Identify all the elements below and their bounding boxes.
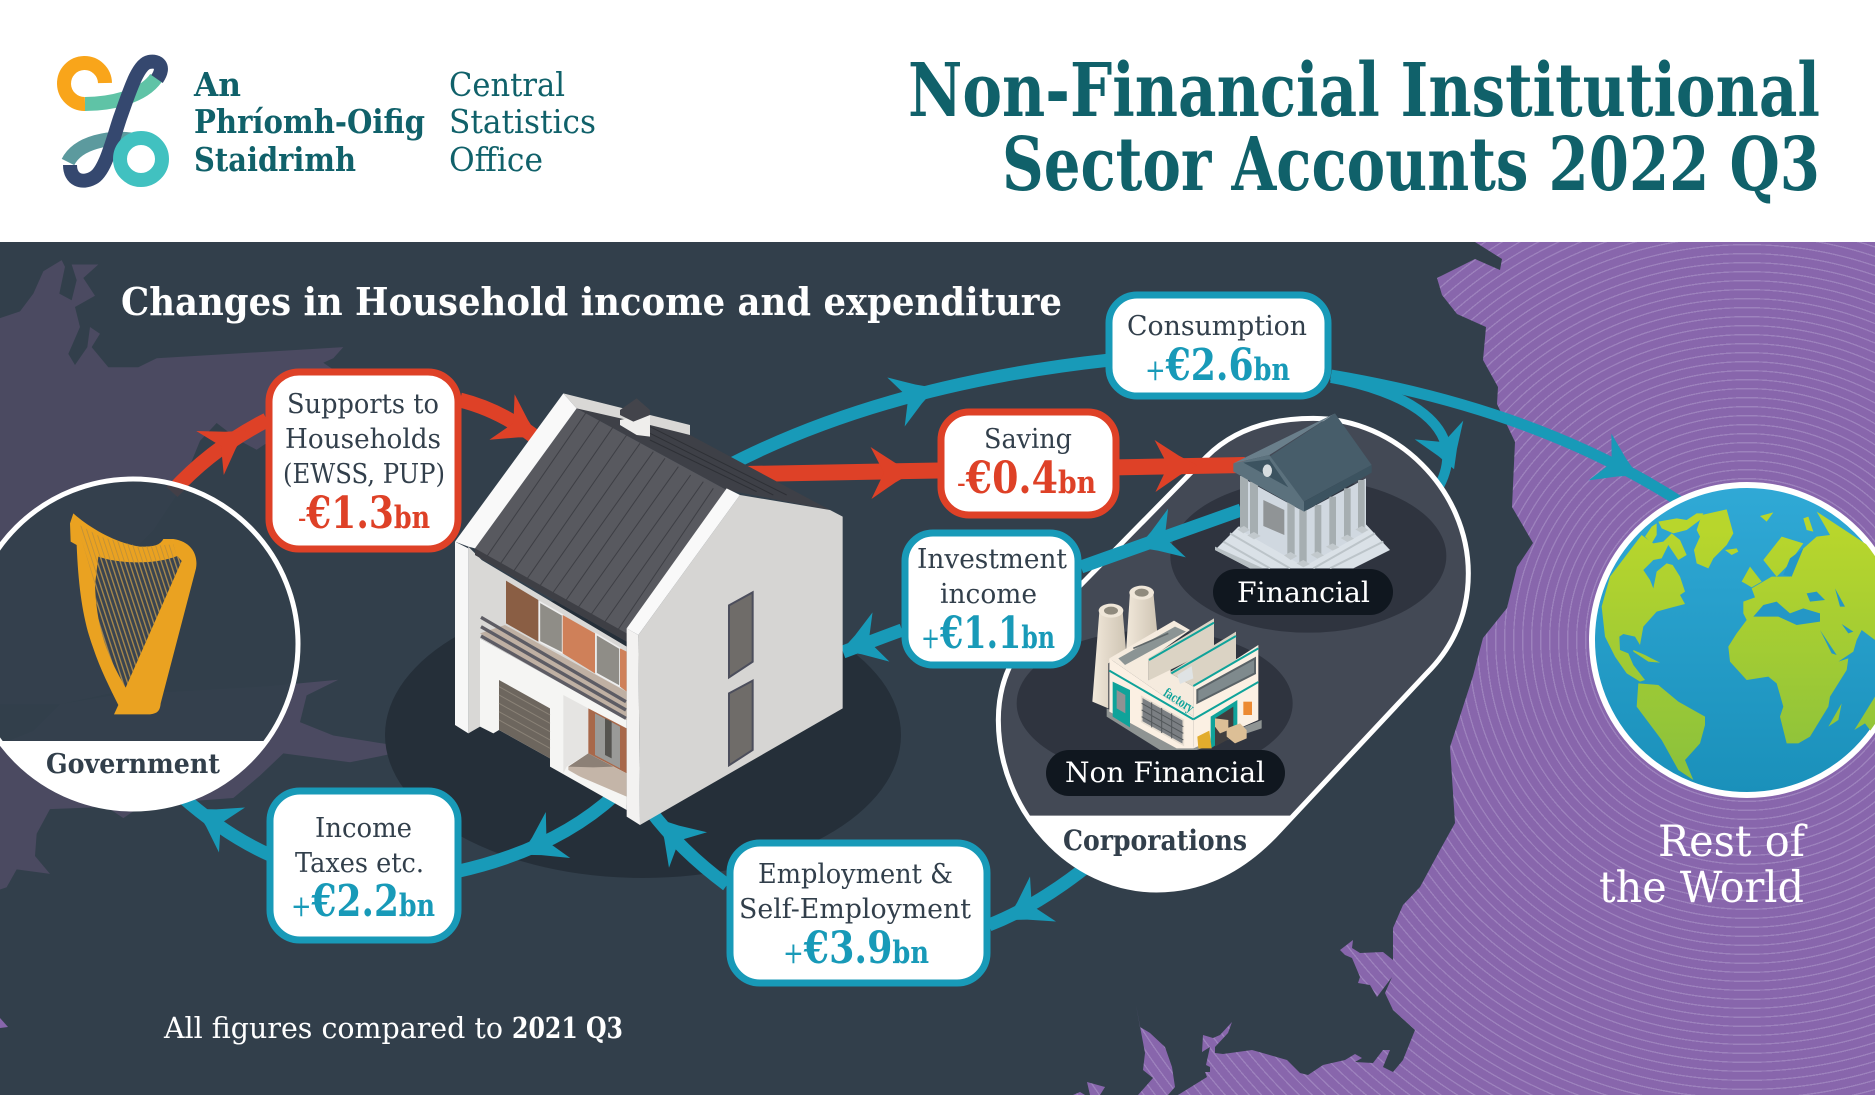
arrow lines: red flows (172, 400, 1245, 492)
factory windows (1197, 658, 1255, 703)
callout: Supports to Households: -€1.3bn (298, 488, 430, 539)
purple land: rest of the world (1073, 242, 1875, 1095)
callout: Supports to Households: Supports to (287, 389, 439, 420)
house right wall (638, 495, 843, 825)
panel: Corporations (998, 418, 1468, 890)
callout: Supports to Households: Households (285, 424, 441, 455)
small purple slivers at left edge (0, 1018, 8, 1028)
logo English name: Office (449, 140, 543, 179)
CSO logo (64, 62, 596, 181)
label pill: Financial (1213, 569, 1393, 615)
house balcony railing (481, 617, 626, 718)
bank roof (1269, 413, 1372, 502)
section heading: Changes in Household income and expenditure (121, 279, 1062, 324)
callout: Income Taxes: Taxes etc. (295, 848, 424, 879)
callout: Employment and Self-Employment: Employment & (758, 859, 953, 890)
factory saw-tooth roof (1148, 618, 1214, 681)
icon: globe (1592, 485, 1875, 795)
callout: Consumption: +€2.6bn (1145, 340, 1290, 391)
globe inland seas (1753, 548, 1853, 655)
panel: Government (0, 479, 298, 809)
icon: harp (70, 513, 196, 714)
footnote: 2021 Q3 (512, 1011, 623, 1045)
callout: Employment and Self-Employment: Self-Employment (739, 894, 971, 925)
bank body (1240, 477, 1366, 567)
callout: Investment income: income (940, 579, 1037, 610)
logo English name (449, 65, 596, 179)
government circle (0, 479, 298, 809)
logo Irish name (193, 65, 425, 179)
label: Rest of the World: Rest of (1658, 817, 1808, 867)
house front lower wall (480, 638, 627, 810)
callout: Saving (941, 412, 1116, 515)
corporations capsule (998, 418, 1468, 890)
callout: Saving: -€0.4bn (957, 453, 1096, 504)
header band (0, 0, 1875, 242)
house facade panels (506, 581, 538, 642)
house shadow ellipse (385, 592, 901, 878)
government label band (0, 741, 266, 809)
house chimney (620, 413, 650, 437)
footnote: All figures compared to (163, 1011, 503, 1045)
corporations label: Corporations (1063, 824, 1247, 857)
factory parcels (1215, 718, 1228, 733)
logo Irish name: An (193, 65, 241, 104)
icon: bank, financial corporations (1215, 413, 1390, 568)
factory base (1107, 708, 1262, 750)
muted land: left coast (0, 260, 417, 890)
callout: Investment income: +€1.1bn (921, 608, 1055, 659)
bank steps (1215, 523, 1390, 568)
icon: house (455, 393, 843, 825)
callout: Supports to Households (269, 372, 458, 549)
logo mark (64, 62, 162, 181)
callout: Income Taxes (270, 791, 458, 940)
factory chimneys (1092, 612, 1126, 708)
label: Rest of the World: the World (1599, 863, 1804, 913)
callout: Employment and Self-Employment: +€3.9bn (783, 923, 929, 974)
factory doors (1113, 682, 1130, 727)
logo Irish name: Phríomh-Oifig (194, 102, 425, 141)
callout: Employment and Self-Employment (730, 843, 987, 983)
callout: Supports to Households: (EWSS, PUP) (283, 459, 445, 490)
callout: Income Taxes: +€2.2bn (291, 876, 435, 927)
government text: Government (46, 749, 220, 780)
callout: Saving: Saving (984, 424, 1072, 455)
label: Rest of the World (1599, 817, 1808, 913)
factory air unit (1177, 666, 1193, 684)
icon: factory, non-financial corporations (1092, 586, 1262, 750)
house right windows (729, 592, 753, 677)
factory sign: factory (1161, 685, 1197, 716)
callout: Income Taxes: Income (315, 813, 412, 844)
house gable trim (455, 393, 577, 548)
callout: Investment income (905, 533, 1078, 665)
house main roof (475, 408, 727, 642)
house garage door (499, 680, 550, 758)
house back roof (577, 408, 830, 510)
logo English name: Central (449, 65, 565, 104)
factory walls (1109, 658, 1193, 748)
arrow lines passing beneath the corporations capsule (989, 378, 1447, 925)
callout: Consumption: Consumption (1127, 311, 1307, 342)
callout: Consumption (1109, 295, 1328, 396)
house front upper wall (468, 547, 627, 733)
label pill: Non Financial (1046, 750, 1285, 796)
arrow lines: blue flows (180, 360, 1685, 885)
label pill: Financial: Financial (1237, 576, 1370, 609)
dark background map (0, 242, 1875, 1095)
logo English name: Statistics (449, 102, 596, 141)
callout: Investment income: Investment (917, 544, 1067, 575)
arrowheads: red (196, 394, 1197, 499)
label pill: Non Financial: Non Financial (1065, 756, 1265, 789)
bank column plinths (1237, 526, 1369, 567)
main title (908, 48, 1820, 208)
house entrance (588, 708, 627, 773)
logo Irish name: Staidrimh (194, 140, 356, 179)
arrowheads: blue (183, 363, 1649, 943)
globe continents (1602, 509, 1875, 780)
bank columns (1240, 476, 1365, 565)
